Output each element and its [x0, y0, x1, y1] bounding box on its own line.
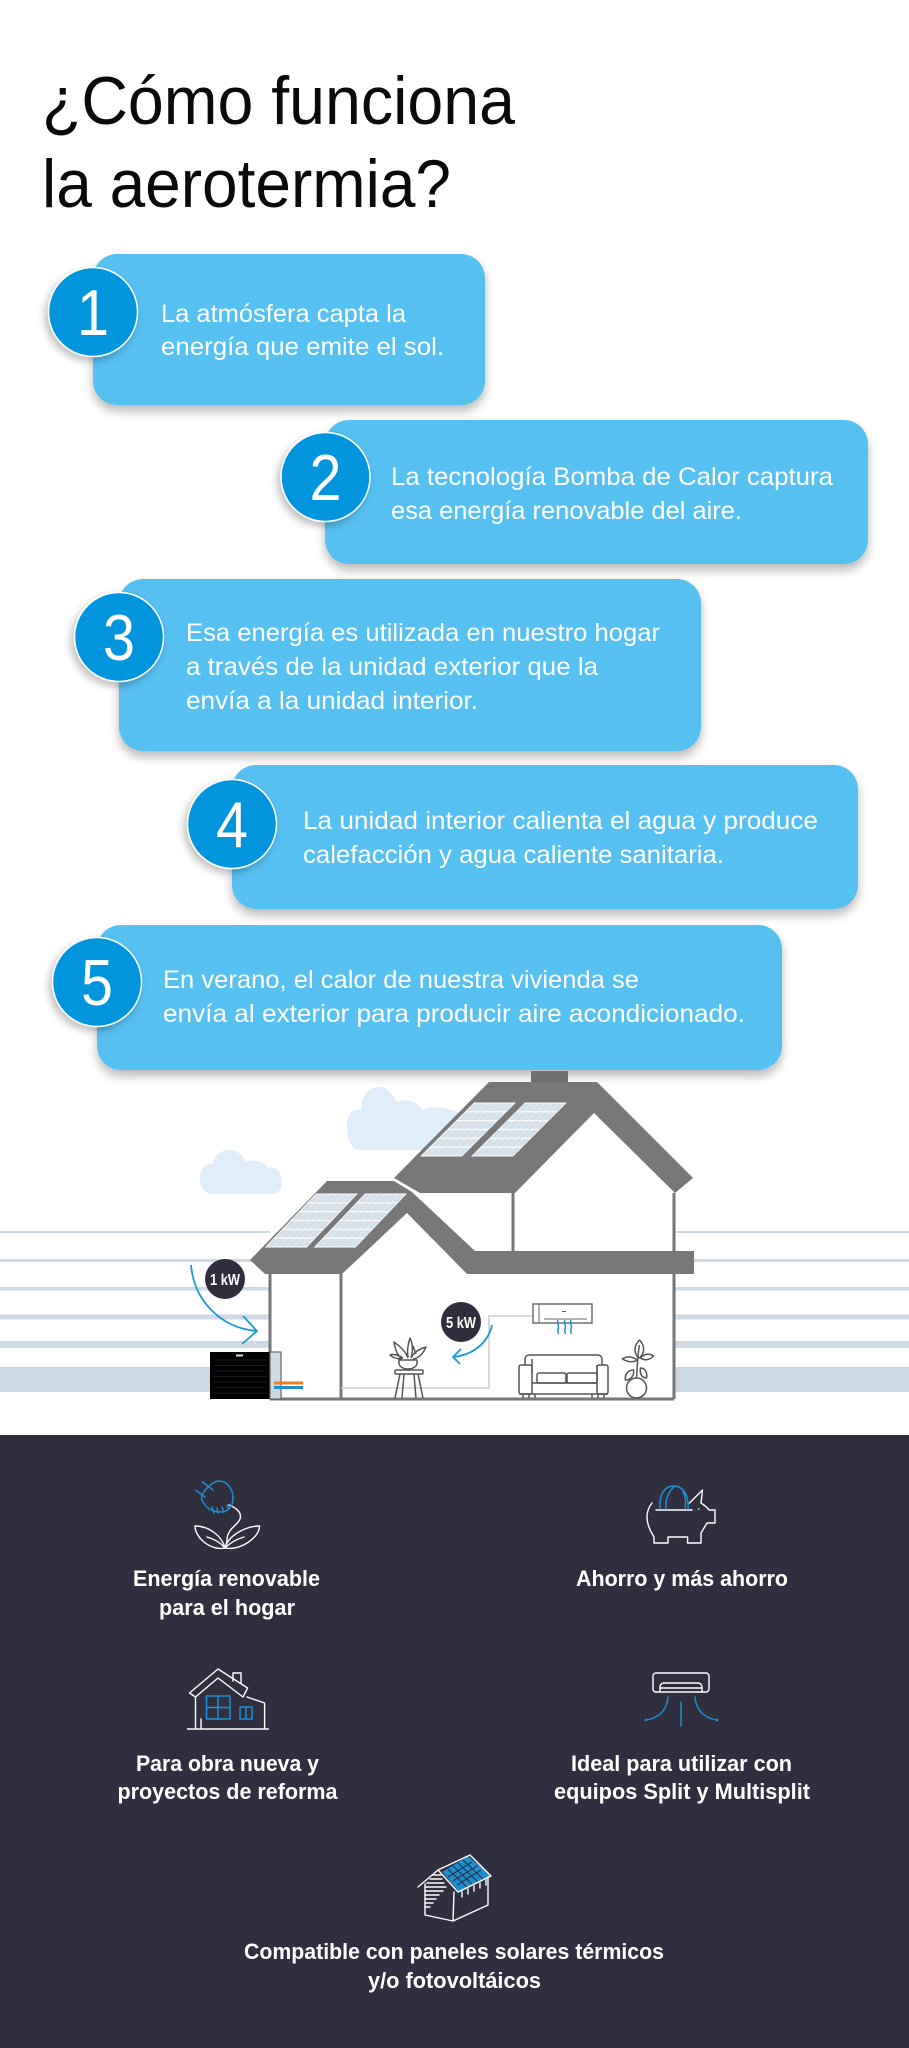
label: equipos Split y Multisplit — [554, 1779, 811, 1804]
step 4 panel: calefacción y agua caliente sanitaria. — [303, 841, 724, 869]
step 4 panel — [188, 765, 858, 909]
benefit: savings — [576, 1486, 788, 1591]
step 3 panel: envía a la unidad interior. — [186, 687, 478, 715]
background stripes — [0, 1231, 909, 1392]
label — [118, 1751, 338, 1804]
label: Ideal para utilizar con — [571, 1751, 792, 1776]
step 2 panel — [281, 420, 868, 564]
cloud: large — [347, 1087, 458, 1150]
step 3 panel: 3 — [103, 601, 135, 674]
label: y/o fotovoltáicos — [368, 1968, 541, 1993]
step 5 panel: envía al exterior para producir aire acondicionado. — [163, 1000, 745, 1028]
sofa — [519, 1355, 608, 1398]
title — [42, 63, 515, 222]
step 3 panel: Esa energía es utilizada en nuestro hogar — [186, 619, 660, 647]
arrow: indoor heat out — [453, 1325, 492, 1364]
lower roof — [250, 1181, 694, 1274]
benefit: split systems — [554, 1673, 811, 1804]
table with plant — [390, 1338, 426, 1398]
step 3 panel: a través de la unidad exterior que la — [186, 653, 598, 681]
floor plant — [622, 1340, 654, 1398]
label — [554, 1751, 811, 1804]
step 1 panel: energía que emite el sol. — [161, 333, 444, 361]
step 2 panel: La tecnología Bomba de Calor captura — [391, 463, 833, 491]
benefit: solar compatible — [244, 1855, 664, 1993]
step 4 panel: La unidad interior calienta el agua y produce — [303, 807, 818, 835]
refrigerant pipe — [341, 1316, 533, 1388]
step 5 panel: En verano, el calor de nuestra vivienda se — [163, 966, 639, 994]
label: para el hogar — [159, 1595, 295, 1620]
water pipes — [274, 1382, 303, 1389]
label: Energía renovable — [133, 1566, 320, 1591]
label: Para obra nueva y — [136, 1751, 320, 1776]
step 1 panel: La atmósfera capta la — [161, 300, 406, 328]
label: proyectos de reforma — [118, 1779, 338, 1804]
step 4 panel: 4 — [216, 788, 248, 861]
chimney — [531, 1071, 568, 1084]
benefit: renewable energy — [133, 1481, 320, 1620]
icon: piggy bank — [647, 1486, 715, 1543]
badge: 5 kW: 5 kW — [446, 1315, 477, 1332]
icon: air conditioner — [645, 1673, 718, 1726]
badge: 1 kW: 1 kW — [210, 1272, 241, 1289]
house — [191, 1071, 694, 1399]
air conditioner unit — [533, 1304, 592, 1334]
solar panels — [266, 1103, 566, 1247]
step 2 panel: 2 — [310, 441, 342, 514]
house walls — [270, 1113, 675, 1399]
panel: benefits — [0, 1435, 909, 2048]
benefit: new build and renovation — [118, 1669, 338, 1804]
step 1 panel: 1 — [77, 276, 109, 349]
arrow: outdoor heat in — [191, 1265, 257, 1344]
upper roof — [394, 1082, 693, 1193]
label — [244, 1939, 664, 1993]
badge: 1 kW — [205, 1259, 245, 1299]
badge: 5 kW — [441, 1302, 481, 1342]
label — [133, 1566, 320, 1620]
icon: house — [188, 1669, 268, 1729]
step 1 panel — [48, 254, 485, 405]
icon: plug flower — [195, 1481, 260, 1548]
step 2 panel: esa energía renovable del aire. — [391, 497, 742, 525]
label: Compatible con paneles solares térmicos — [244, 1939, 664, 1964]
step 5 panel — [52, 925, 782, 1070]
step 3 panel — [74, 579, 701, 751]
step 5 panel: 5 — [81, 946, 113, 1019]
label: Ahorro y más ahorro — [576, 1566, 788, 1591]
heat pump outdoor unit — [210, 1352, 281, 1399]
title: la aerotermia? — [42, 146, 451, 222]
cloud: small — [200, 1150, 282, 1194]
title: ¿Cómo funciona — [42, 63, 515, 139]
icon: solar house — [418, 1855, 491, 1921]
